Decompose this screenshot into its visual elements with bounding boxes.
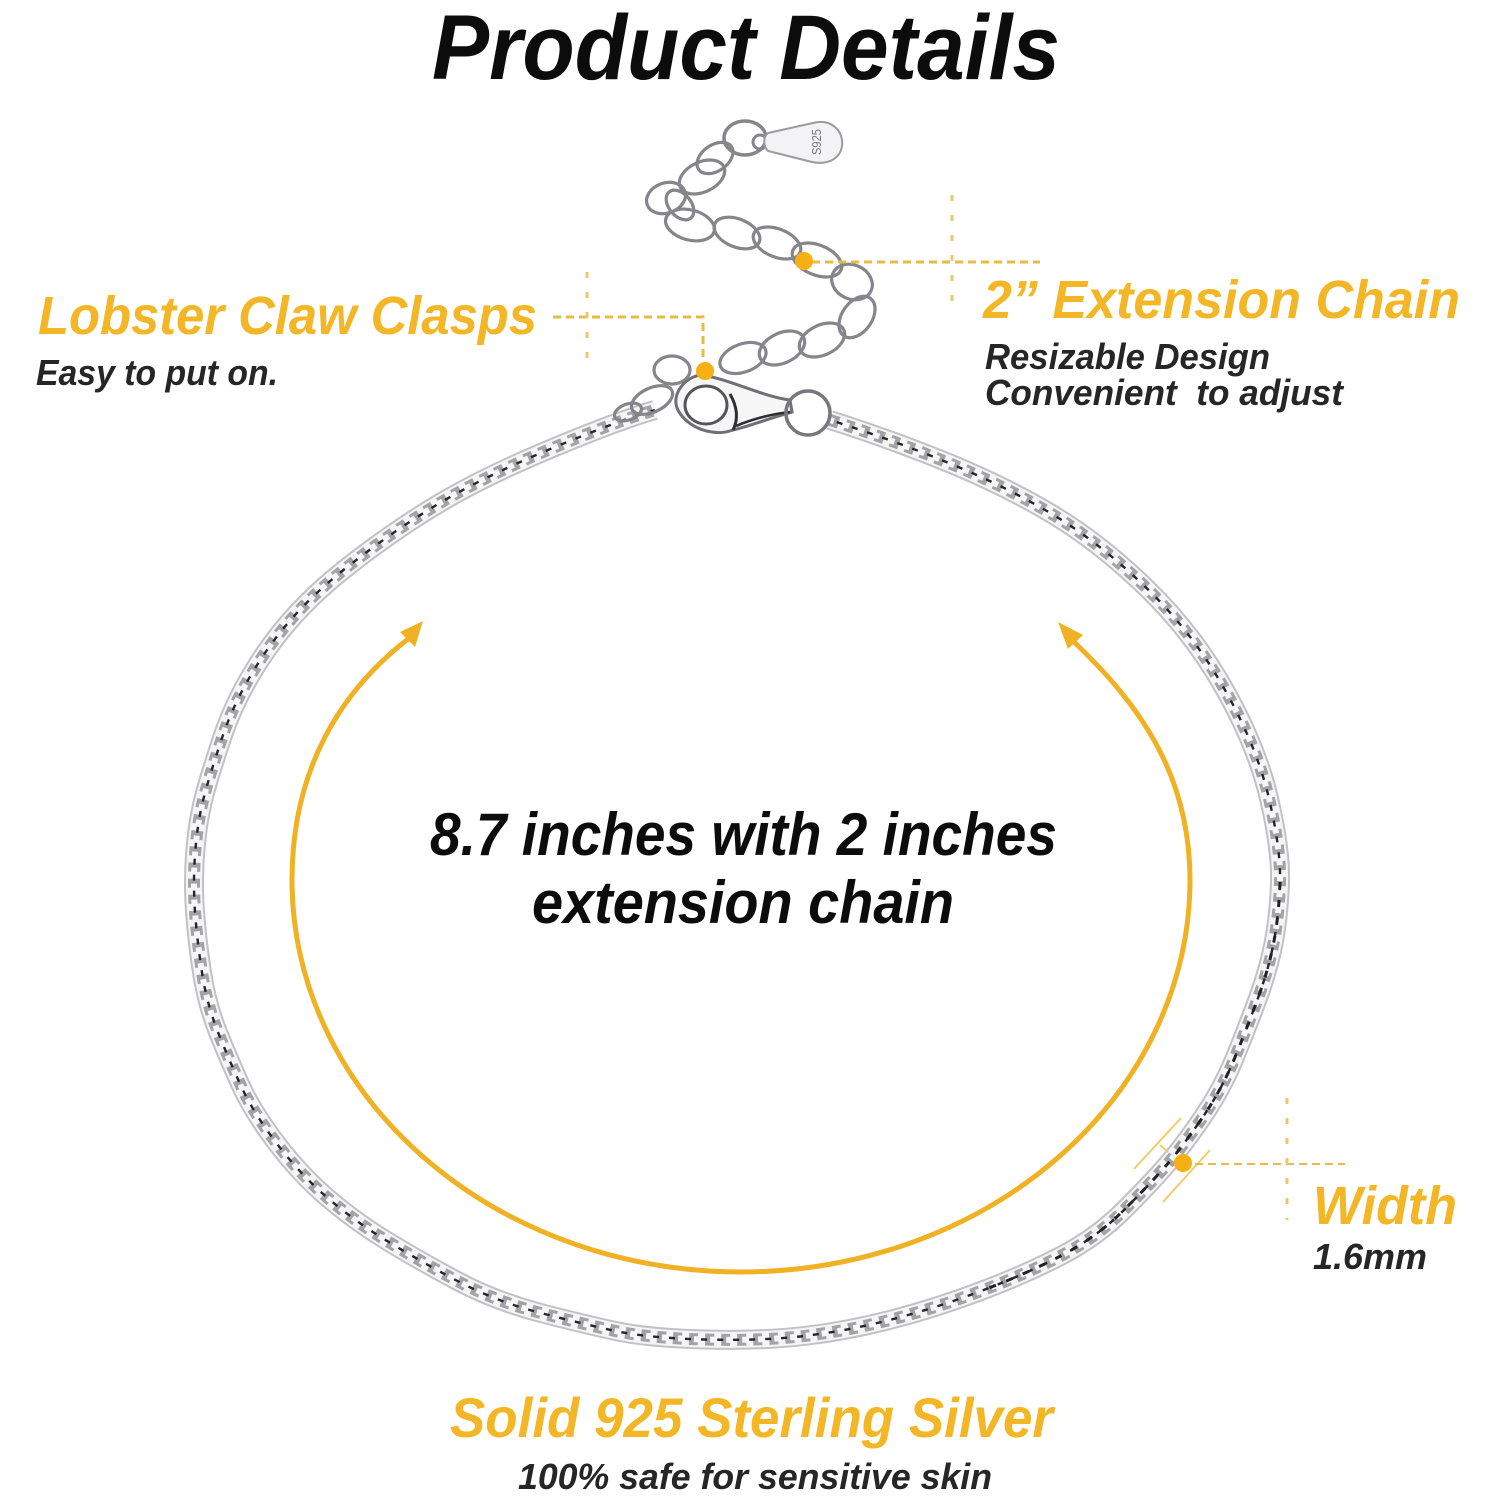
callout: extension chain	[795, 195, 1460, 413]
material label	[450, 1386, 1056, 1496]
callout: lobster claw clasps	[36, 272, 714, 393]
extension chain links	[642, 136, 882, 379]
material label: Solid 925 Sterling Silver	[450, 1386, 1056, 1449]
size text	[430, 801, 1057, 936]
callout: extension chain: Resizable Design	[985, 336, 1270, 377]
callout: width	[1134, 1098, 1457, 1277]
callout: extension chain: 2” Extension Chain	[982, 270, 1460, 330]
yellow size arrow	[292, 621, 1190, 1272]
size text: extension chain	[532, 869, 954, 936]
lobster claw clasp	[612, 356, 830, 435]
tag stamp: S925	[809, 129, 824, 155]
callout: extension chain: Convenient to adjust	[985, 372, 1345, 413]
teardrop tag with ring	[724, 121, 842, 163]
callout: lobster claw clasps: Easy to put on.	[36, 352, 278, 393]
arrowhead left	[400, 621, 423, 647]
title: Product Details	[432, 0, 1060, 99]
arrowhead right	[1058, 622, 1083, 649]
callout: width: Width	[1313, 1176, 1457, 1236]
callout: width: 1.6mm	[1313, 1236, 1427, 1277]
bracelet rope chain	[194, 410, 1280, 1340]
material label: 100% safe for sensitive skin	[518, 1456, 992, 1496]
callout: lobster claw clasps: Lobster Claw Clasps	[38, 286, 537, 346]
size text: 8.7 inches with 2 inches	[430, 801, 1057, 868]
